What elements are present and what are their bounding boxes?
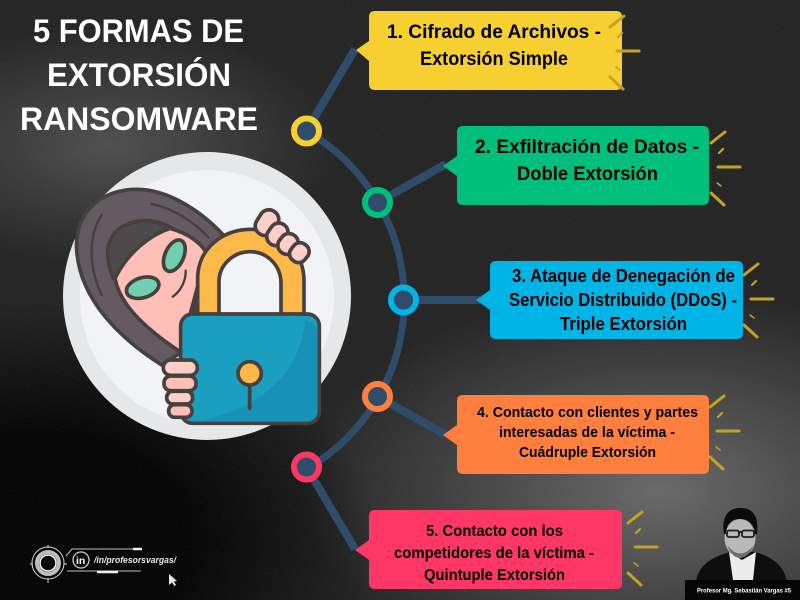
node 1 yellow: [294, 118, 319, 144]
author portrait and caption: Profesor Mg. Sebastián Vargas #5: [697, 588, 791, 594]
box 5: contacto con competidores: [355, 510, 622, 589]
box 2: exfiltración de datos: 2. Exfiltración de Datos -: [475, 137, 699, 158]
tech lines: [66, 549, 142, 572]
rays box 4: [710, 396, 739, 469]
box 3: ataque DDoS: [476, 261, 743, 339]
box 1: cifrado de archivos: [356, 11, 622, 90]
box 1: cifrado de archivos: Extorsión Simple: [420, 49, 568, 70]
rays box 3: [744, 264, 773, 337]
icon: target ring: [30, 545, 67, 583]
white circle badge: [63, 152, 351, 440]
node 4 orange: [365, 384, 390, 409]
fingers on shackle: [252, 206, 312, 266]
rays box 5: [628, 512, 657, 585]
icon: linkedin: [73, 552, 89, 568]
box 5: contacto con competidores: competidores de la víctima -: [394, 545, 594, 562]
title: 5 FORMAS DE: [33, 13, 244, 49]
face: [115, 228, 207, 352]
connectors from nodes to boxes: [306, 49, 480, 549]
box 1: cifrado de archivos: 1. Cifrado de Archivos -: [387, 22, 601, 43]
smile: [173, 271, 186, 297]
title: RANSOMWARE: [20, 101, 258, 137]
icon: cursor: [169, 574, 177, 586]
caption band: [685, 580, 800, 600]
box 4: contacto con clientes: [443, 395, 709, 474]
node 2 green: [365, 190, 390, 215]
box 4: contacto con clientes: interesadas de la víctima -: [499, 424, 675, 441]
hair strands: [92, 204, 208, 295]
hair: [723, 508, 757, 534]
handle: /in/profesorsvargas/: [93, 555, 177, 565]
box 5: contacto con competidores: Quintuple Extorsión: [424, 567, 565, 584]
node 5 pink: [294, 454, 319, 480]
shirt: [729, 552, 756, 580]
box 5: contacto con competidores: 5. Contacto con los: [426, 523, 563, 540]
suit: [696, 552, 787, 582]
rays box 2: [711, 132, 740, 205]
box 4: contacto con clientes: Cuádruple Extorsión: [519, 444, 656, 461]
hood shadow: [108, 221, 175, 278]
eyes: [159, 237, 190, 275]
hair: [76, 189, 223, 365]
title: [20, 13, 258, 137]
illustration: hacker behind padlock: [63, 152, 351, 440]
box 2: exfiltración de datos: Doble Extorsión: [517, 164, 658, 185]
rays box 1: [610, 16, 639, 89]
box 3: ataque DDoS: 3. Ataque de Denegación de: [512, 266, 735, 286]
linkedin logo and handle: [30, 545, 177, 586]
icon: hacker and padlock: [76, 189, 319, 423]
shackle: [198, 229, 304, 315]
glasses: [727, 530, 754, 537]
box 2: exfiltración de datos: [443, 126, 709, 205]
icon: linkedin: in: [76, 555, 85, 567]
box 3: ataque DDoS: Servicio Distribuido (DDoS) -: [509, 290, 737, 310]
beard shadow: [727, 545, 754, 558]
box 3: ataque DDoS: Triple Extorsión: [560, 314, 687, 334]
lock body: [181, 314, 319, 423]
keyhole: [238, 362, 261, 385]
box 4: contacto con clientes: 4. Contacto con clientes y partes: [477, 404, 698, 421]
curved timeline spine: [306, 131, 404, 469]
node 3 blue: [391, 288, 416, 312]
hand: [163, 360, 197, 417]
author portrait and caption: [685, 508, 800, 600]
title: EXTORSIÓN: [47, 57, 231, 93]
face: [724, 519, 756, 557]
